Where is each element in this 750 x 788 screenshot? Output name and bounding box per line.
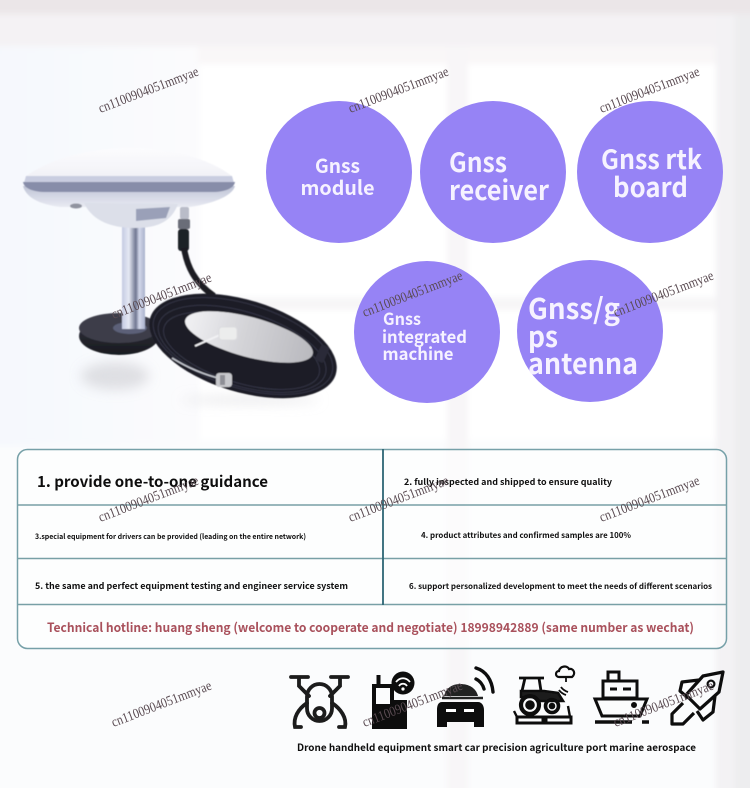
- circle: Gnss rtk board: board: [613, 166, 688, 205]
- floor reflection: [81, 362, 320, 404]
- watermarks: cn1100904051mmyae: [361, 269, 465, 321]
- item 1: 1. provide one-to-one guidance: [37, 471, 268, 492]
- watermarks: cn1100904051mmyae: [347, 65, 451, 117]
- item 3: 3.special equipment for drivers can be provided (leading on the entire network): [35, 532, 306, 542]
- watermarks: cn1100904051mmyae: [97, 474, 201, 526]
- application caption: Drone handheld equipment smart car precision agriculture port marine aerospace: [297, 740, 696, 754]
- icon: coiled cable: [137, 274, 349, 418]
- watermarks: cn1100904051mmyae: [97, 65, 201, 117]
- watermarks: cn1100904051mmyae: [110, 679, 214, 731]
- icon: smart car: [437, 668, 493, 727]
- icon: drone: [291, 677, 348, 727]
- circle: Gnss rtk board: [577, 101, 723, 243]
- panel: application icons: [291, 667, 723, 754]
- icon: chrome pole: [122, 225, 145, 329]
- watermarks: cn1100904051mmyae: [347, 474, 451, 526]
- circle: Gnss/gps antenna: Gnss/g: [528, 287, 620, 328]
- icon: magnetic base: [79, 313, 159, 355]
- item 2: 2. fully inspected and shipped to ensure quality: [404, 476, 612, 488]
- item 4: 4. product attributes and confirmed samples are 100%: [421, 530, 631, 541]
- circle: Gnss integrated machine: machine: [382, 340, 454, 365]
- technical hotline: Technical hotline: huang sheng (welcome to cooperate and negotiate) 18998942889 (same number as wechat): [47, 617, 694, 636]
- circle: Gnss receiver: [420, 101, 566, 243]
- product photo: GNSS antenna with cable: [23, 148, 349, 418]
- circle: Gnss receiver: receiver: [449, 169, 549, 208]
- circle: Gnss rtk board: Gnss rtk: [601, 138, 702, 177]
- watermarks: cn1100904051mmyae: [612, 269, 716, 321]
- circle: Gnss/gps antenna: [517, 260, 663, 402]
- watermarks: cn1100904051mmyae: [361, 679, 465, 731]
- watermarks: cn1100904051mmyae: [598, 474, 702, 526]
- circle: Gnss module: module: [300, 172, 374, 201]
- circle: Gnss module: [266, 101, 412, 243]
- icon: antenna dome: [23, 148, 235, 228]
- item 5: 5. the same and perfect equipment testing and engineer service system: [35, 579, 348, 592]
- icon: aerospace rocket: [672, 672, 723, 724]
- circle: Gnss module: Gnss: [315, 150, 360, 179]
- circle: Gnss/gps antenna: antenna: [528, 342, 638, 383]
- circle: Gnss/gps antenna: ps: [528, 315, 558, 356]
- icon: handheld equipment: [372, 672, 414, 727]
- icon: port marine ship: [595, 672, 649, 722]
- watermarks: [97, 65, 716, 731]
- watermarks: cn1100904051mmyae: [598, 65, 702, 117]
- icon: precision agriculture tractor: [514, 667, 574, 723]
- watermarks: cn1100904051mmyae: [110, 271, 214, 323]
- icon: cable connector: [178, 207, 214, 296]
- icon: silver plug: [172, 358, 232, 387]
- panel: service table: [18, 449, 727, 648]
- circle: Gnss integrated machine: Gnss: [383, 305, 421, 330]
- icon: white plug in coil: [195, 327, 237, 346]
- circle: Gnss integrated machine: [354, 261, 500, 403]
- circle: Gnss receiver: Gnss: [449, 141, 507, 180]
- circle: Gnss integrated machine: integrated: [382, 323, 467, 348]
- item 6: 6. support personalized development to meet the needs of different scenarios: [409, 581, 712, 592]
- panel: product categories: [266, 101, 723, 403]
- watermarks: cn1100904051mmyae: [612, 679, 716, 731]
